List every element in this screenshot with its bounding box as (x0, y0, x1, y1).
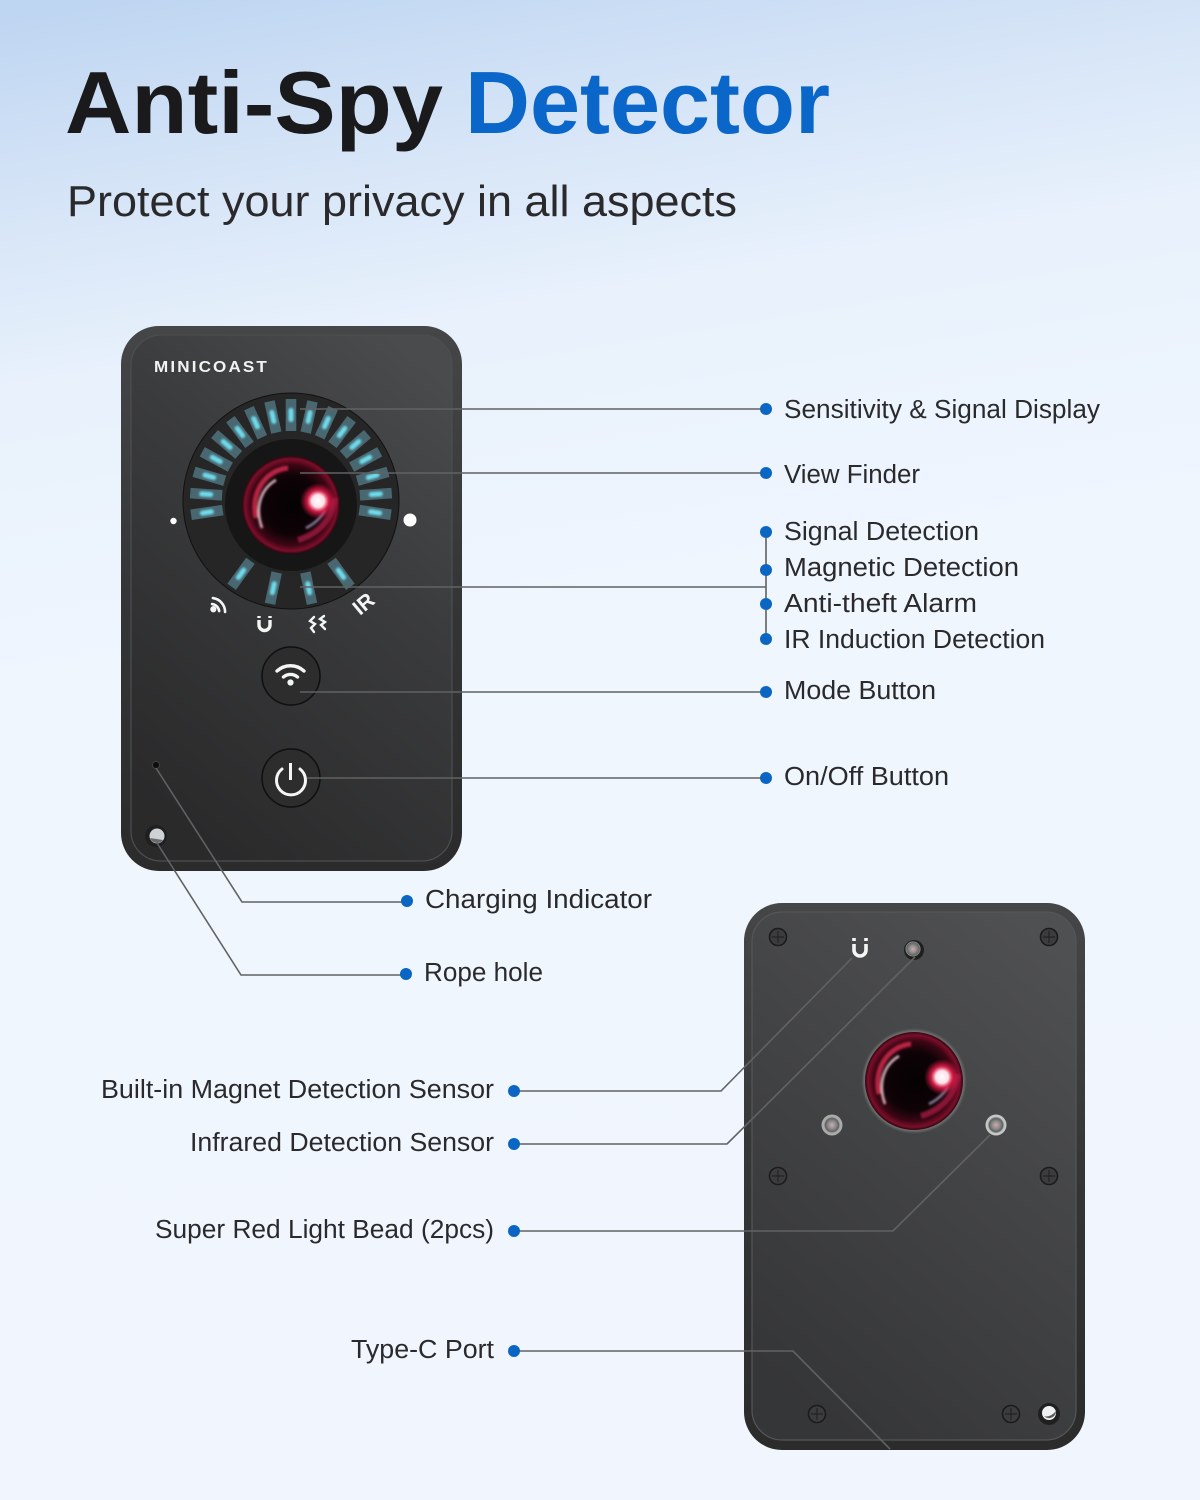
rope hole (145, 825, 167, 847)
LED bars (190, 399, 392, 605)
callout: built-in magnet detection sensor (101, 958, 852, 1104)
callout: sensitivity and signal display: Sensitivity & Signal Display (784, 396, 1100, 424)
device shell (121, 326, 462, 871)
callout: super red light bead: Super Red Light Bead (2pcs) (155, 1216, 494, 1244)
brand logo: MINICOAST (154, 359, 269, 376)
icon: vibration (310, 616, 325, 632)
callout: super red light bead (155, 1135, 990, 1244)
icon: power (276, 763, 306, 795)
callout: detection modes: Anti-theft Alarm (784, 590, 977, 618)
infrared sensor (904, 940, 924, 960)
callout: detection modes (300, 518, 1045, 654)
callout: detection modes: Signal Detection (784, 518, 979, 546)
mode button (262, 647, 320, 705)
type-c port hole (1038, 1403, 1060, 1425)
callout: type-c port (351, 1336, 890, 1449)
panel: front of device (121, 326, 462, 871)
charging indicator hole (152, 762, 160, 768)
callout: infrared detection sensor: Infrared Detection Sensor (190, 1129, 495, 1157)
callout: mode button (300, 677, 936, 705)
red light bead left (822, 1114, 842, 1136)
title: Detector (465, 53, 830, 152)
callout: detection modes: Magnetic Detection (784, 554, 1019, 582)
callout: sensitivity and signal display (300, 396, 1100, 424)
callout: detection modes: IR Induction Detection (784, 626, 1045, 654)
title: Anti-Spy (65, 53, 443, 152)
icon: signal (211, 598, 227, 613)
subtitle: Protect your privacy in all aspects (67, 177, 737, 226)
callout: rope hole (157, 843, 543, 987)
callout: rope hole: Rope hole (424, 959, 543, 987)
callout: charging indicator: Charging Indicator (425, 886, 653, 914)
screws (770, 928, 1058, 1422)
panel: back of device (744, 903, 1085, 1450)
red light bead right (986, 1114, 1006, 1136)
signal dial (183, 393, 399, 609)
indicator dots (170, 514, 416, 526)
icon: magnet (259, 616, 270, 630)
device face (131, 335, 452, 861)
callout: mode button: Mode Button (784, 677, 936, 705)
callout: on/off button: On/Off Button (784, 763, 949, 791)
rear lens (863, 1030, 965, 1132)
callout: view finder (300, 461, 921, 489)
view finder lens (242, 456, 340, 554)
callout: on/off button (307, 763, 949, 791)
callout: built-in magnet detection sensor: Built-in Magnet Detection Sensor (101, 1076, 495, 1104)
back shell (744, 903, 1085, 1450)
icon: magnet (854, 938, 866, 956)
callout: type-c port: Type-C Port (351, 1336, 494, 1364)
label: IR: IR (348, 589, 379, 620)
back face (752, 912, 1076, 1440)
power button (262, 749, 320, 807)
lens housing (225, 439, 357, 571)
icon: wifi (277, 666, 304, 685)
callout: infrared detection sensor (190, 957, 915, 1157)
callout: view finder: View Finder (784, 461, 921, 489)
callout: charging indicator (156, 768, 653, 914)
